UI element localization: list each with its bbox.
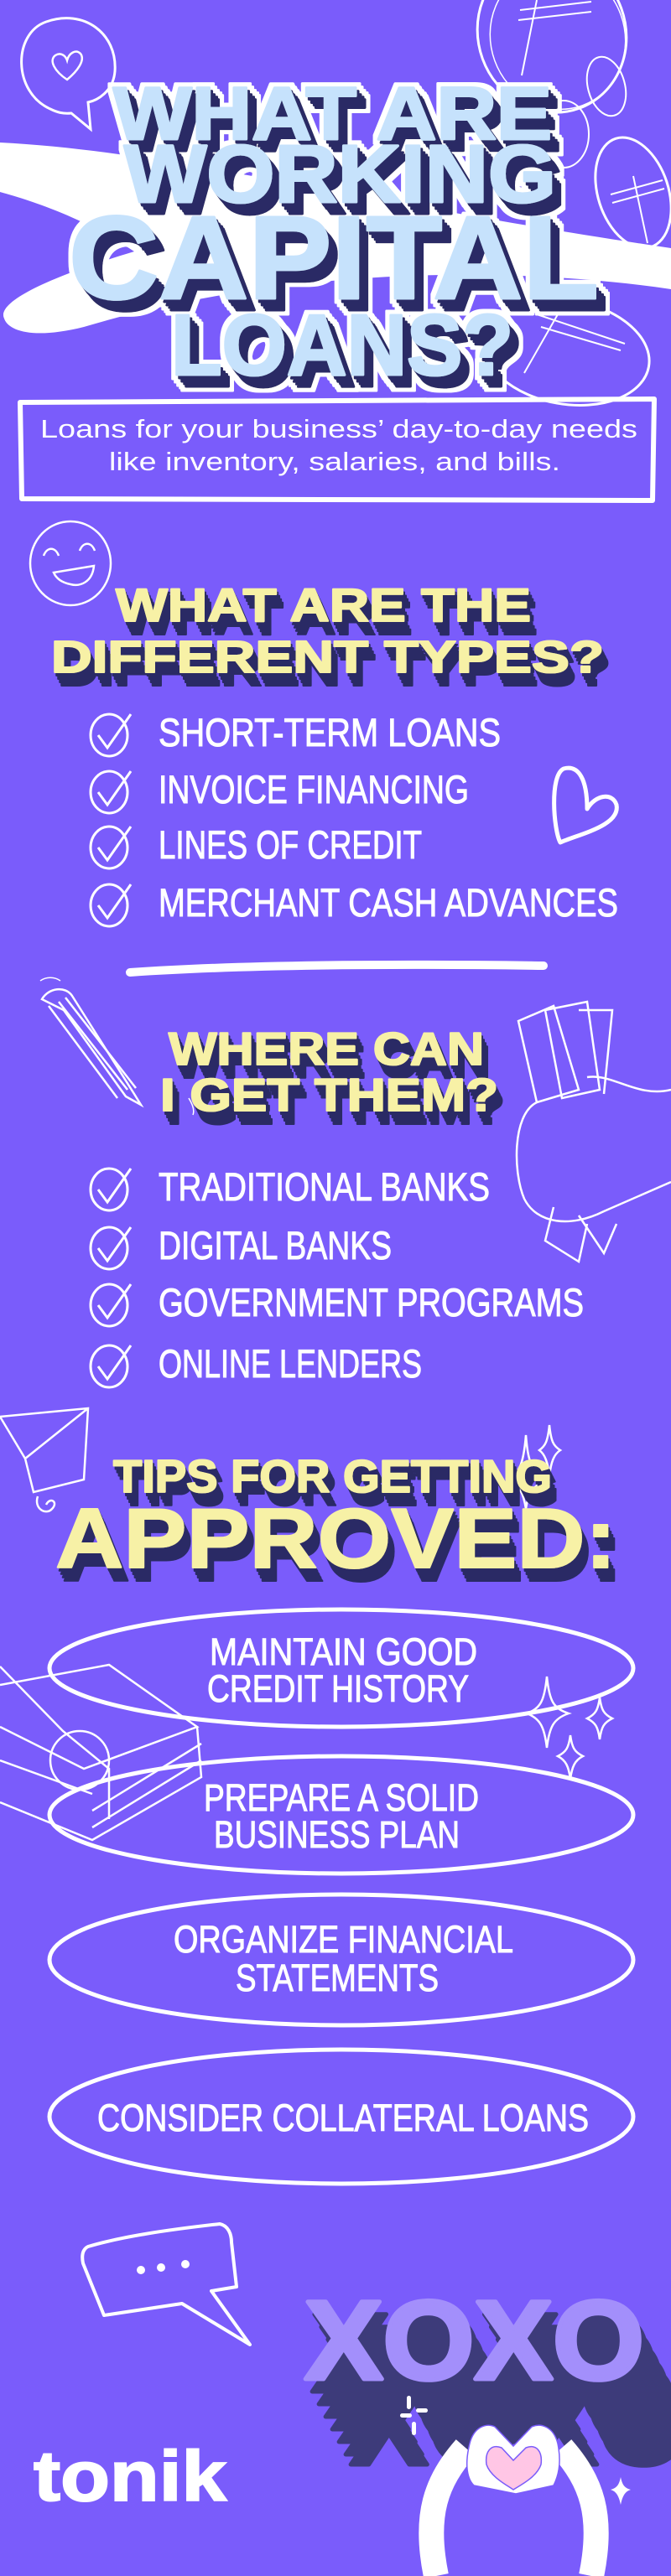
tip: maintain good credit history: MAINTAIN GOOD xyxy=(210,1630,477,1673)
title: WHAT ARE xyxy=(113,71,552,155)
tip: prepare a solid business plan: PREPARE A SOLID xyxy=(204,1776,479,1819)
heading: what are the different types: DIFFERENT TYPES? xyxy=(51,632,604,682)
icon: chat bubble xyxy=(82,2224,250,2345)
XOXO: XOXO xyxy=(304,2278,644,2403)
tip: consider collateral loans: CONSIDER COLLATERAL LOANS xyxy=(97,2097,589,2139)
subtitle box: Loans for your business’ day-to-day needs xyxy=(40,414,637,443)
tip: prepare a solid business plan: BUSINESS PLAN xyxy=(214,1813,460,1856)
icon: paper plane xyxy=(0,1408,88,1511)
item: lines of credit xyxy=(91,822,422,868)
item: short-term loans: SHORT-TERM LOANS xyxy=(159,710,501,754)
tip: maintain good credit history: CREDIT HISTORY xyxy=(207,1667,469,1710)
heading: where can i get them: I GET THEM? xyxy=(160,1069,498,1121)
subtitle box xyxy=(20,399,654,500)
item: invoice financing xyxy=(91,767,469,813)
item: online lenders: ONLINE LENDERS xyxy=(159,1341,422,1386)
heading: what are the different types: WHAT ARE THE xyxy=(116,578,531,631)
subtitle box: like inventory, salaries, and bills. xyxy=(109,447,560,476)
icon: sparkles right xyxy=(527,1677,612,1779)
item: invoice financing: INVOICE FINANCING xyxy=(159,767,469,811)
tip: consider collateral loans xyxy=(49,2050,633,2184)
icon: heart doodle xyxy=(554,768,616,842)
swoosh behind title xyxy=(0,143,671,333)
coins illustration xyxy=(455,0,671,417)
item: traditional banks xyxy=(91,1164,490,1210)
item: digital banks: DIGITAL BANKS xyxy=(159,1223,392,1267)
icon: fist holding cash xyxy=(517,1002,671,1262)
title: CAPITAL xyxy=(69,191,599,324)
logo: tonik: tonik xyxy=(34,2437,226,2516)
item: government programs: GOVERNMENT PROGRAMS xyxy=(159,1280,584,1324)
list: loan types xyxy=(91,710,618,926)
tip: prepare a solid business plan xyxy=(49,1756,633,1874)
heading: tips for getting approved xyxy=(55,1450,616,1586)
icon: smiley xyxy=(30,521,111,605)
item: digital banks xyxy=(91,1223,392,1269)
title: WORKING xyxy=(124,128,556,220)
item: online lenders xyxy=(91,1341,422,1387)
tip: organize financial statements xyxy=(49,1894,633,2025)
item: lines of credit: LINES OF CREDIT xyxy=(159,822,422,867)
icon: sparkles top xyxy=(507,1425,560,1509)
icon: heart hands ring xyxy=(431,2425,596,2576)
tip: maintain good credit history xyxy=(49,1609,633,1727)
heading: what are the different types xyxy=(51,578,604,682)
heading: where can i get them: WHERE CAN xyxy=(169,1023,484,1075)
icon: money stack xyxy=(0,1665,201,1840)
icon: speech bubble with heart xyxy=(22,18,115,129)
tip: organize financial statements: ORGANIZE FINANCIAL xyxy=(174,1918,513,1961)
icon: sparkle small xyxy=(400,2396,631,2505)
heading: where can i get them xyxy=(160,1023,498,1121)
title: LOANS? xyxy=(171,297,513,393)
item: traditional banks: TRADITIONAL BANKS xyxy=(159,1164,490,1209)
title xyxy=(69,71,599,393)
tip: organize financial statements: STATEMENTS xyxy=(236,1957,439,1999)
heading: tips for getting approved: TIPS FOR GETTING xyxy=(113,1450,552,1502)
heading: tips for getting approved: APPROVED: xyxy=(55,1492,616,1586)
list: where to get xyxy=(91,1164,584,1387)
icon: pencil xyxy=(40,977,194,1115)
